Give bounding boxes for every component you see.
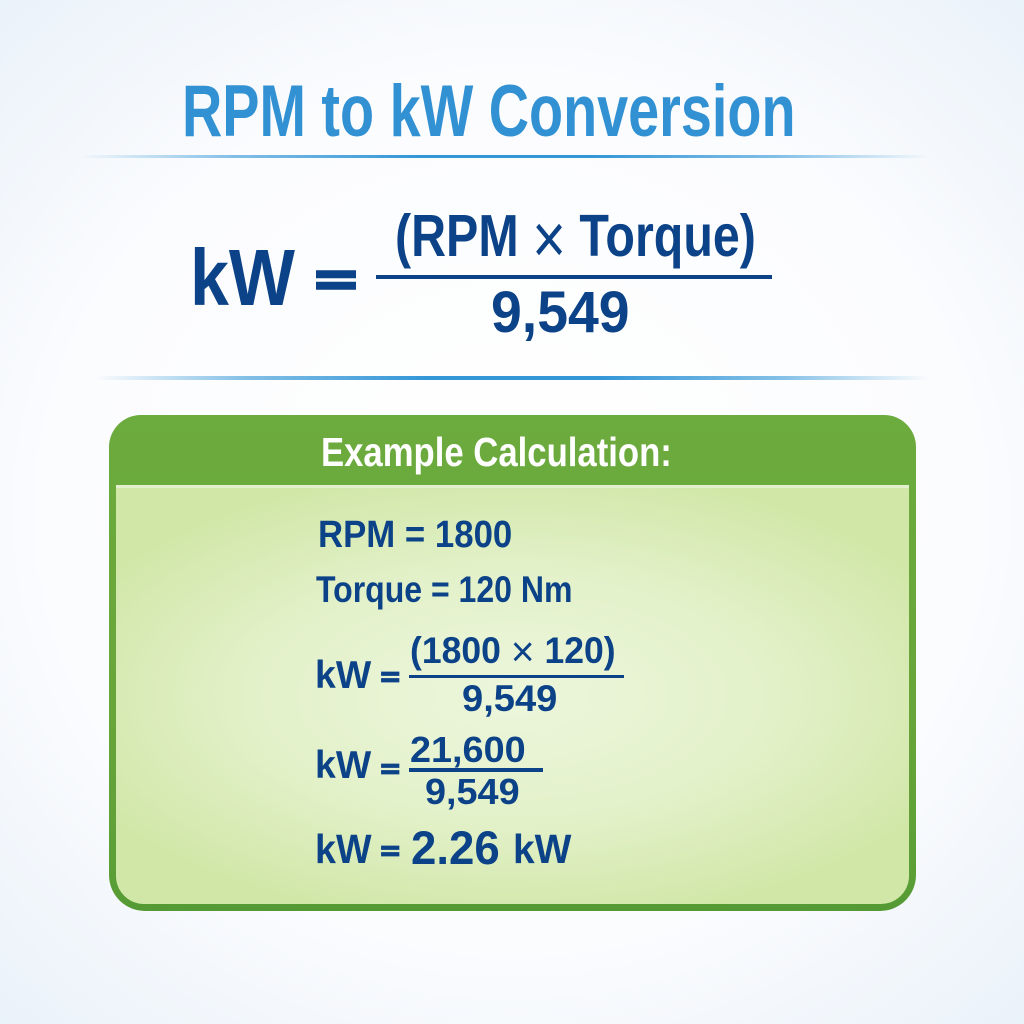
result equals sign: = [381,838,399,864]
step 1 denominator: 9,549 [462,678,557,719]
step 1 [315,628,624,719]
step 1 equals sign: = [381,664,399,690]
torque value: Torque = 120 Nm [316,569,572,610]
panel: example calculation [109,415,916,911]
formula left side: kW [190,233,295,322]
step 1 bar [409,674,624,678]
formula fraction bar [376,275,772,279]
title: RPM to kW Conversion [182,71,796,152]
RPM value: RPM = 1800 [318,514,512,556]
step 2 [315,729,543,812]
result value: 2.26 [410,820,499,874]
main formula [190,200,772,345]
result label: kW [315,826,372,872]
step 2 label: kW [315,744,371,787]
panel body [116,485,909,904]
step 2 numerator: 21,600 [410,729,526,770]
title rule [80,155,930,158]
step 2 equals sign: = [381,756,399,782]
result unit: kW [513,826,571,872]
result [315,820,572,874]
formula rule [95,376,930,380]
formula numerator: (RPM × Torque) [395,200,756,279]
formula equals sign: = [316,256,356,303]
step 2 denominator: 9,549 [425,771,520,812]
step 1 numerator: (1800 × 120) [410,628,615,676]
step 1 label: kW [315,654,371,697]
step 2 bar [408,768,542,772]
formula denominator: 9,549 [491,280,630,345]
panel heading: Example Calculation: [321,429,672,475]
